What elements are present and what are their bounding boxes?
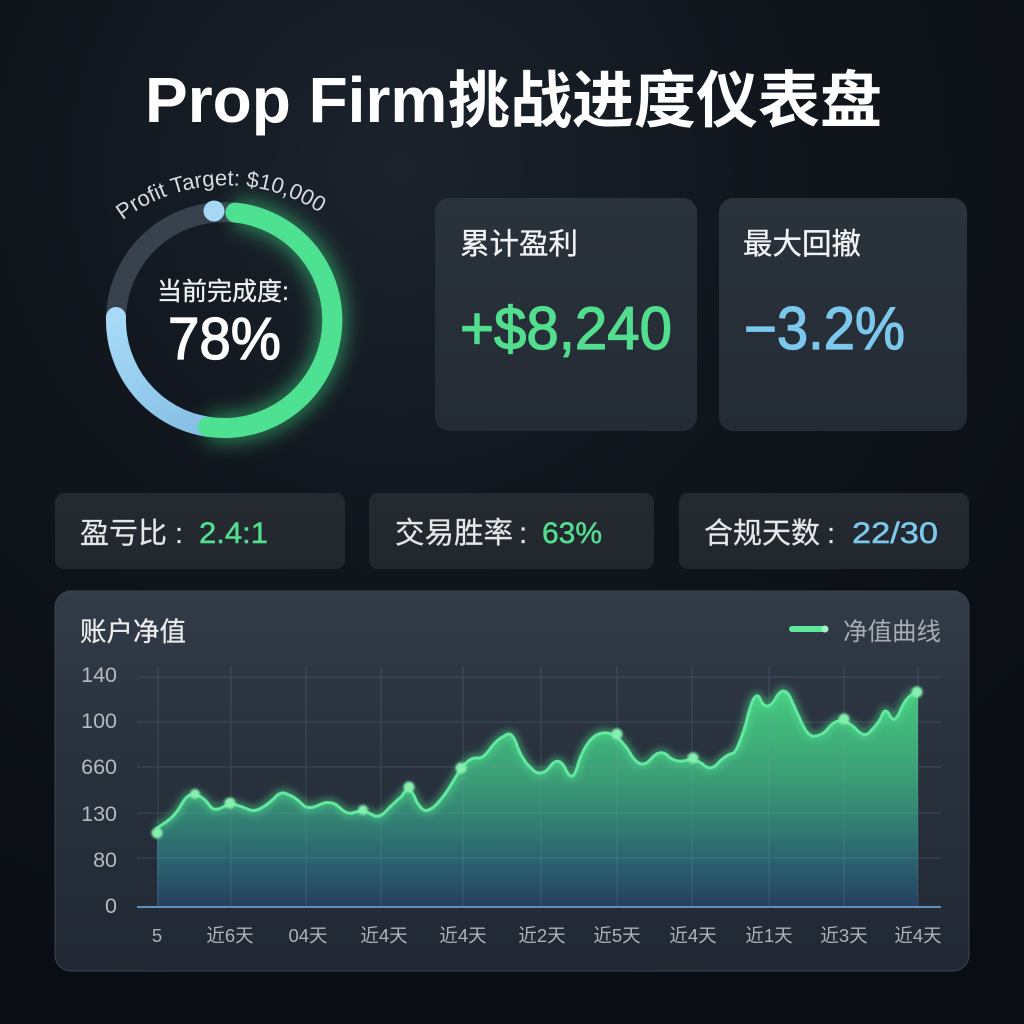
ring marker dot bbox=[204, 200, 224, 222]
card label: 最大回撤 bbox=[743, 228, 861, 261]
stat value: 22/30 bbox=[852, 517, 938, 550]
y axis labels: 100 bbox=[81, 709, 117, 733]
x axis labels: 近4天 bbox=[894, 925, 942, 946]
x axis labels: 近2天 bbox=[518, 925, 566, 946]
stat value: 2.4:1 bbox=[199, 517, 268, 550]
x axis labels: 近4天 bbox=[669, 925, 717, 946]
stat card: profit-loss ratio bbox=[55, 493, 345, 569]
completion value: 78% bbox=[168, 306, 281, 372]
title: Prop Firm bbox=[145, 64, 447, 136]
title: 挑战进度仪表盘 bbox=[448, 67, 882, 136]
y axis labels: 130 bbox=[81, 802, 117, 826]
stat label: 合规天数: bbox=[704, 517, 835, 550]
x axis labels: 近6天 bbox=[206, 925, 254, 946]
area fill bbox=[157, 691, 918, 907]
y axis labels: 660 bbox=[81, 755, 117, 779]
drawdown value: −3.2% bbox=[744, 295, 905, 362]
x axis labels bbox=[152, 925, 942, 946]
x axis labels: 近1天 bbox=[745, 925, 793, 946]
stat label: 交易胜率: bbox=[395, 517, 527, 550]
x axis labels: 04天 bbox=[288, 925, 328, 946]
ring blue segment bbox=[116, 317, 208, 427]
ring track bbox=[116, 212, 332, 428]
stat value: 63% bbox=[542, 517, 602, 550]
x axis labels: 近5天 bbox=[593, 925, 641, 946]
completion label: 当前完成度: bbox=[157, 278, 289, 306]
chart title: 账户净值 bbox=[80, 617, 186, 647]
ring green segment bbox=[208, 213, 332, 428]
y axis labels: 140 bbox=[81, 663, 117, 687]
progress ring gauge bbox=[106, 171, 360, 455]
profit value: +$8,240 bbox=[460, 295, 672, 362]
legend bbox=[792, 618, 941, 646]
panel: account equity chart bbox=[55, 591, 969, 971]
ring glow bbox=[208, 213, 332, 428]
x axis labels: 近3天 bbox=[820, 925, 868, 946]
panel: max drawdown bbox=[719, 198, 967, 431]
x axis labels: 近4天 bbox=[360, 925, 408, 946]
stat card: win rate bbox=[369, 493, 654, 569]
x axis baseline bbox=[137, 906, 941, 908]
equity line glow bbox=[157, 691, 917, 828]
legend line bbox=[792, 626, 828, 632]
stat label: 盈亏比 : bbox=[80, 517, 183, 550]
stat card: compliance days bbox=[679, 493, 969, 569]
profit target arc label: Profit Target: $10,000 bbox=[115, 171, 326, 220]
y axis labels: 80 bbox=[93, 848, 117, 872]
grid lines bbox=[137, 667, 941, 907]
card label: 累计盈利 bbox=[460, 228, 578, 261]
x axis labels: 近4天 bbox=[439, 925, 487, 946]
equity line bbox=[157, 691, 917, 828]
panel: cumulative profit bbox=[435, 198, 697, 431]
data point markers bbox=[152, 686, 922, 838]
y axis labels: 0 bbox=[105, 894, 117, 918]
x axis labels: 5 bbox=[152, 925, 162, 946]
legend label: 净值曲线 bbox=[843, 618, 941, 646]
y axis labels bbox=[81, 663, 117, 918]
